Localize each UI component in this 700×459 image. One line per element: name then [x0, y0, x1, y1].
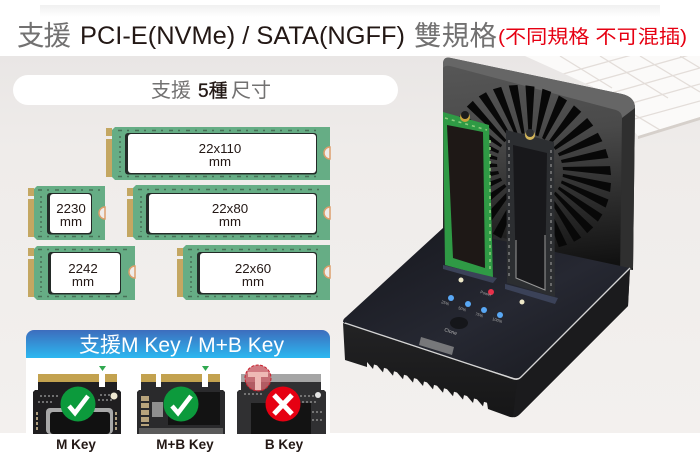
card: 2242: mm — [72, 274, 94, 289]
title: 支援 — [17, 20, 71, 51]
LED captions: 100% — [492, 316, 503, 324]
clone button: Clone — [443, 327, 458, 337]
base right side — [513, 268, 630, 417]
LED captions: 25% — [441, 299, 450, 307]
card: 22x110: mm — [209, 154, 231, 169]
card: 22x110: 22x110 — [199, 141, 241, 156]
brand logo — [419, 337, 454, 355]
card: 22x60: 22x60 — [235, 261, 271, 276]
LED captions: Power — [480, 289, 493, 298]
pill heading: five sizes — [13, 75, 398, 105]
title — [17, 20, 687, 51]
card: 2230 — [28, 186, 105, 240]
card: 22x110 — [106, 127, 330, 180]
base top — [343, 228, 630, 378]
base front side with fins — [343, 268, 630, 417]
back panel with fan — [443, 58, 635, 277]
card: 2230: 2230 — [56, 201, 86, 216]
pill heading: five sizes: 支援 — [151, 79, 191, 102]
key labels: M Key — [56, 437, 96, 452]
LED indicators — [448, 278, 524, 318]
title: (不同規格 不可混插) — [498, 26, 687, 48]
key labels: M+B Key — [156, 437, 214, 452]
top fade band — [40, 5, 660, 17]
card: 22x80: 22x80 — [212, 201, 248, 216]
base highlight edge — [345, 268, 630, 379]
device: docking station — [343, 58, 635, 417]
black SSD — [505, 129, 558, 304]
M+B Key connector — [137, 366, 225, 434]
M Key connector — [33, 366, 121, 434]
panel body — [26, 358, 330, 434]
fan vents — [449, 74, 611, 260]
card: 22x60 — [177, 245, 330, 300]
panel: key types — [26, 330, 330, 434]
B Key connector — [237, 365, 326, 434]
card: 2230: mm — [60, 214, 82, 229]
green SSD — [443, 111, 497, 283]
clone button — [443, 317, 468, 337]
pill heading: five sizes: 尺寸 — [231, 79, 271, 102]
card: 22x60: mm — [242, 274, 264, 289]
panel header — [26, 330, 330, 358]
card: 2242 — [28, 246, 135, 300]
panel header: 支援M Key / M+B Key — [79, 334, 284, 357]
LED captions — [441, 289, 503, 324]
pill heading: five sizes: 5種 — [198, 80, 228, 102]
LED captions: 75% — [475, 311, 484, 319]
card: 2242: 2242 — [68, 261, 98, 276]
title: PCI-E(NVMe) / SATA(NGFF) — [80, 22, 405, 50]
title: 雙規格 — [414, 20, 497, 51]
key labels — [56, 437, 304, 452]
keyboard — [526, 56, 700, 139]
card: 22x80 — [127, 185, 330, 240]
key labels: B Key — [265, 437, 304, 452]
LED captions: 50% — [458, 305, 467, 313]
card: 22x80: mm — [219, 214, 241, 229]
